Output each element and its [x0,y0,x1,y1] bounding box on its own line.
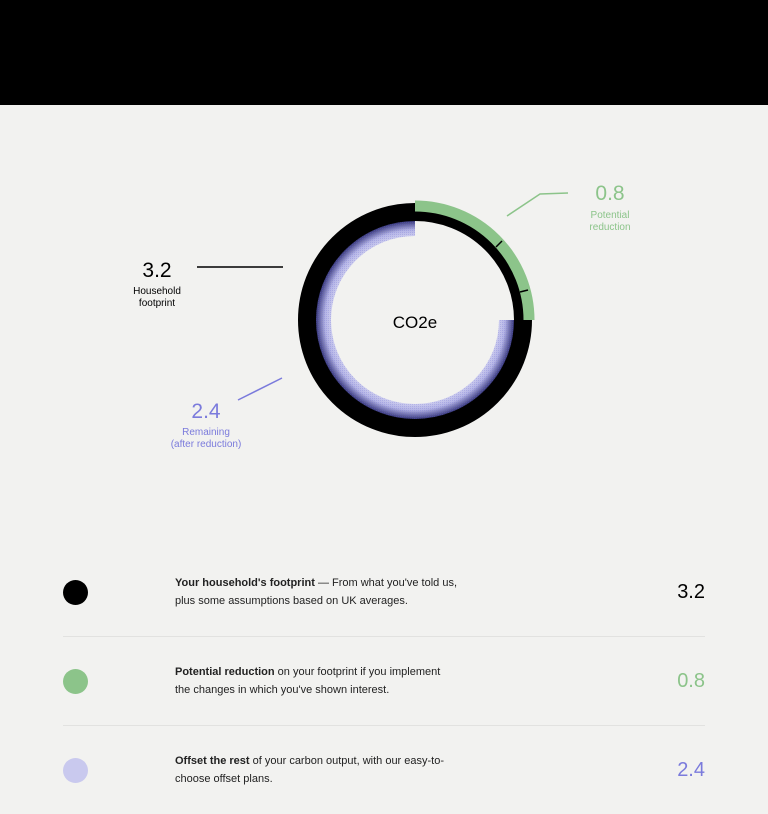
text [175,577,457,607]
value: 0.8 [677,670,705,692]
icon: green dot [63,669,88,694]
text: Potential reduction on your footprint if you implement [175,666,440,678]
label: household footprint: footprint [139,298,175,309]
ring: potential reduction (green) [415,206,529,320]
text: plus some assumptions based on UK averages. [175,595,408,607]
label: potential reduction: Potential [591,210,629,221]
legend row: footprint [63,577,705,607]
ring: remaining (purple) [323,228,507,412]
label: household footprint [133,259,283,309]
text: Your household's footprint — From what you've told us, [175,577,457,589]
label: potential reduction [507,182,631,233]
icon: purple dot [63,758,88,783]
label: potential reduction: 0.8 [595,182,625,205]
value: 2.4 [677,759,705,781]
legend row: offset [63,755,705,785]
text [175,666,440,696]
text [175,755,444,785]
donut chart [133,182,631,450]
label: remaining: Remaining [182,427,230,438]
value: 3.2 [677,581,705,603]
text: the changes in which you've shown interest. [175,684,389,696]
text: Offset the rest of your carbon output, with our easy-to- [175,755,444,767]
icon: black dot [63,580,88,605]
center label: CO2e [393,313,437,332]
legend row: reduction [63,666,705,696]
label: remaining: (after reduction) [171,439,241,450]
ring: household footprint (black) [307,212,523,428]
top black band [0,0,768,105]
label: potential reduction: reduction [589,222,631,233]
label: household footprint: Household [133,286,181,297]
text: choose offset plans. [175,773,273,785]
label: remaining [171,378,282,450]
label: remaining: 2.4 [191,400,221,423]
label: household footprint: 3.2 [142,259,172,282]
